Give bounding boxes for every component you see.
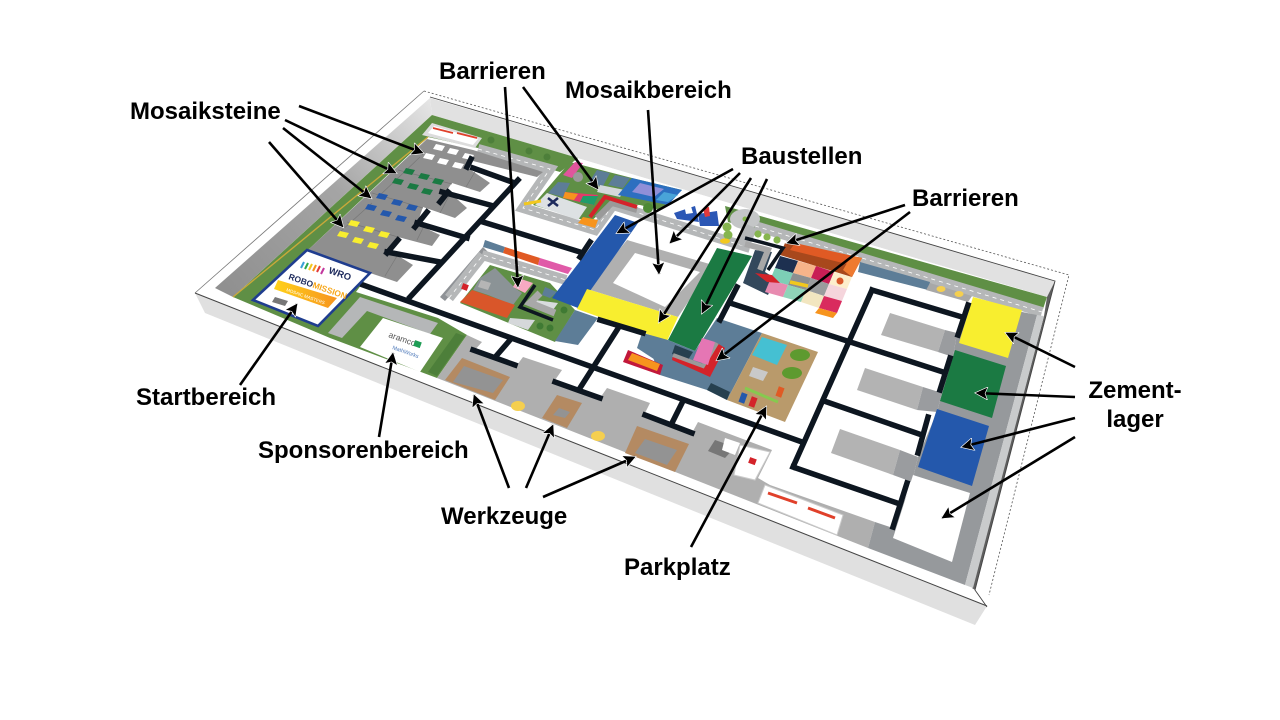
cement store: yellow	[959, 297, 1022, 358]
panel: mosaic stones storage	[308, 139, 543, 282]
panel: left city block	[440, 240, 598, 345]
label: Parkplatz: Parkplatz	[624, 554, 731, 581]
label: Barrieren right: Barrieren	[912, 185, 1019, 212]
rainbow stripe	[301, 262, 324, 274]
label: Barrieren top: Barrieren	[439, 58, 546, 85]
RoboMission text: ROBOMISSION	[287, 271, 348, 301]
panel: lower city block with parking	[623, 318, 818, 422]
labels	[130, 58, 1182, 581]
arrow: cement yellow	[1006, 333, 1075, 367]
QR code	[272, 297, 288, 306]
palm trees	[782, 349, 810, 379]
label: Baustellen: Baustellen	[741, 143, 862, 170]
arrow: Werkzeuge 2	[526, 425, 553, 488]
WRO text: WRO	[327, 265, 352, 283]
pool	[752, 337, 787, 365]
label: Sponsorenbereich: Sponsorenbereich	[258, 437, 469, 464]
orange roof	[780, 243, 862, 277]
gravel tabs	[831, 313, 957, 482]
MathWorks logo: MathWorks	[391, 345, 420, 360]
arrow: yellow stones	[269, 142, 343, 227]
back-right building and coins	[858, 262, 972, 302]
field floor	[233, 115, 1047, 588]
parking bar	[745, 388, 778, 402]
yellow mosaic stones	[337, 220, 390, 249]
small car on back road	[720, 238, 730, 244]
arrow: Startbereich	[240, 304, 297, 385]
panel: top city block	[524, 162, 682, 228]
arrow: cement white	[942, 437, 1075, 518]
coins	[511, 401, 605, 441]
band text: MOSAIC MASTERS	[286, 287, 326, 305]
logo square	[413, 340, 422, 348]
arrow: Parkplatz	[691, 407, 766, 547]
arrow: Barrieren left	[505, 87, 518, 287]
label: Mosaiksteine: Mosaiksteine	[130, 98, 281, 125]
arrow: Barrieren top	[523, 87, 598, 189]
orange band	[274, 280, 337, 308]
arrow: Baustelle blue	[617, 169, 733, 233]
long model panel	[758, 485, 843, 535]
label: Startbereich: Startbereich	[136, 384, 276, 411]
arrow: Baustelle yellow	[659, 178, 751, 322]
trees along back grass	[488, 136, 550, 160]
aramco logo: aramco	[387, 329, 418, 348]
sponsor area panel	[328, 297, 465, 376]
back roads	[478, 149, 1042, 312]
gold line along mosaic area	[233, 137, 428, 297]
excavator	[790, 282, 808, 286]
panel: top model building	[422, 123, 482, 148]
panel: construction sites	[552, 215, 752, 351]
cars	[738, 386, 785, 408]
construction site: blue	[552, 215, 638, 308]
construction site: yellow	[577, 289, 678, 341]
cement store: green	[940, 350, 1006, 418]
arrows: Mosaiksteine	[299, 106, 423, 153]
label: Mosaikbereich: Mosaikbereich	[565, 77, 732, 104]
blue mosaic stones	[365, 193, 418, 222]
arrow: blue stones	[283, 128, 371, 198]
small model panel	[708, 438, 770, 480]
label: Zementlager: Zement-	[1088, 377, 1182, 404]
construction site: green	[668, 248, 752, 351]
mosaic tiles	[765, 256, 852, 318]
table frame and walls	[195, 91, 1069, 625]
arrows	[240, 87, 1075, 547]
label: Zementlager: lager	[1106, 406, 1164, 433]
arrow: Baustelle green	[702, 179, 767, 313]
arrow: Werkzeuge 3	[543, 457, 635, 497]
trees at roundabout	[722, 216, 781, 244]
arrow: Mosaikbereich	[648, 110, 659, 274]
panel: right cement storage frame	[831, 297, 1044, 588]
grass strips	[233, 115, 1047, 378]
tool area 3	[625, 426, 689, 472]
white mosaic stones	[423, 144, 474, 169]
arrow: Baustelle white	[670, 173, 740, 243]
arrow: green stones	[285, 120, 396, 173]
icon: robot picture	[674, 203, 719, 226]
cement store: white	[893, 475, 970, 562]
cement store: blue	[918, 409, 989, 486]
parking lot	[727, 333, 818, 422]
black lines	[363, 159, 968, 527]
panel: right city block	[743, 238, 862, 318]
start area panel	[253, 250, 370, 326]
arrow: cement blue	[962, 418, 1075, 447]
tool area 1	[445, 358, 510, 400]
arrow: cement green	[976, 393, 1075, 397]
label: Werkzeuge: Werkzeuge	[441, 503, 567, 530]
green mosaic stones	[392, 168, 444, 195]
tool area 2	[542, 395, 582, 428]
arrow: Werkzeuge 1	[474, 395, 509, 488]
tree hedge	[428, 333, 465, 376]
arrow: Sponsorenbereich	[379, 353, 393, 437]
arrow: Barrieren right upper	[787, 205, 905, 243]
panel: lower gray service area	[437, 335, 875, 548]
arrow: Barrieren right lower	[717, 212, 910, 360]
